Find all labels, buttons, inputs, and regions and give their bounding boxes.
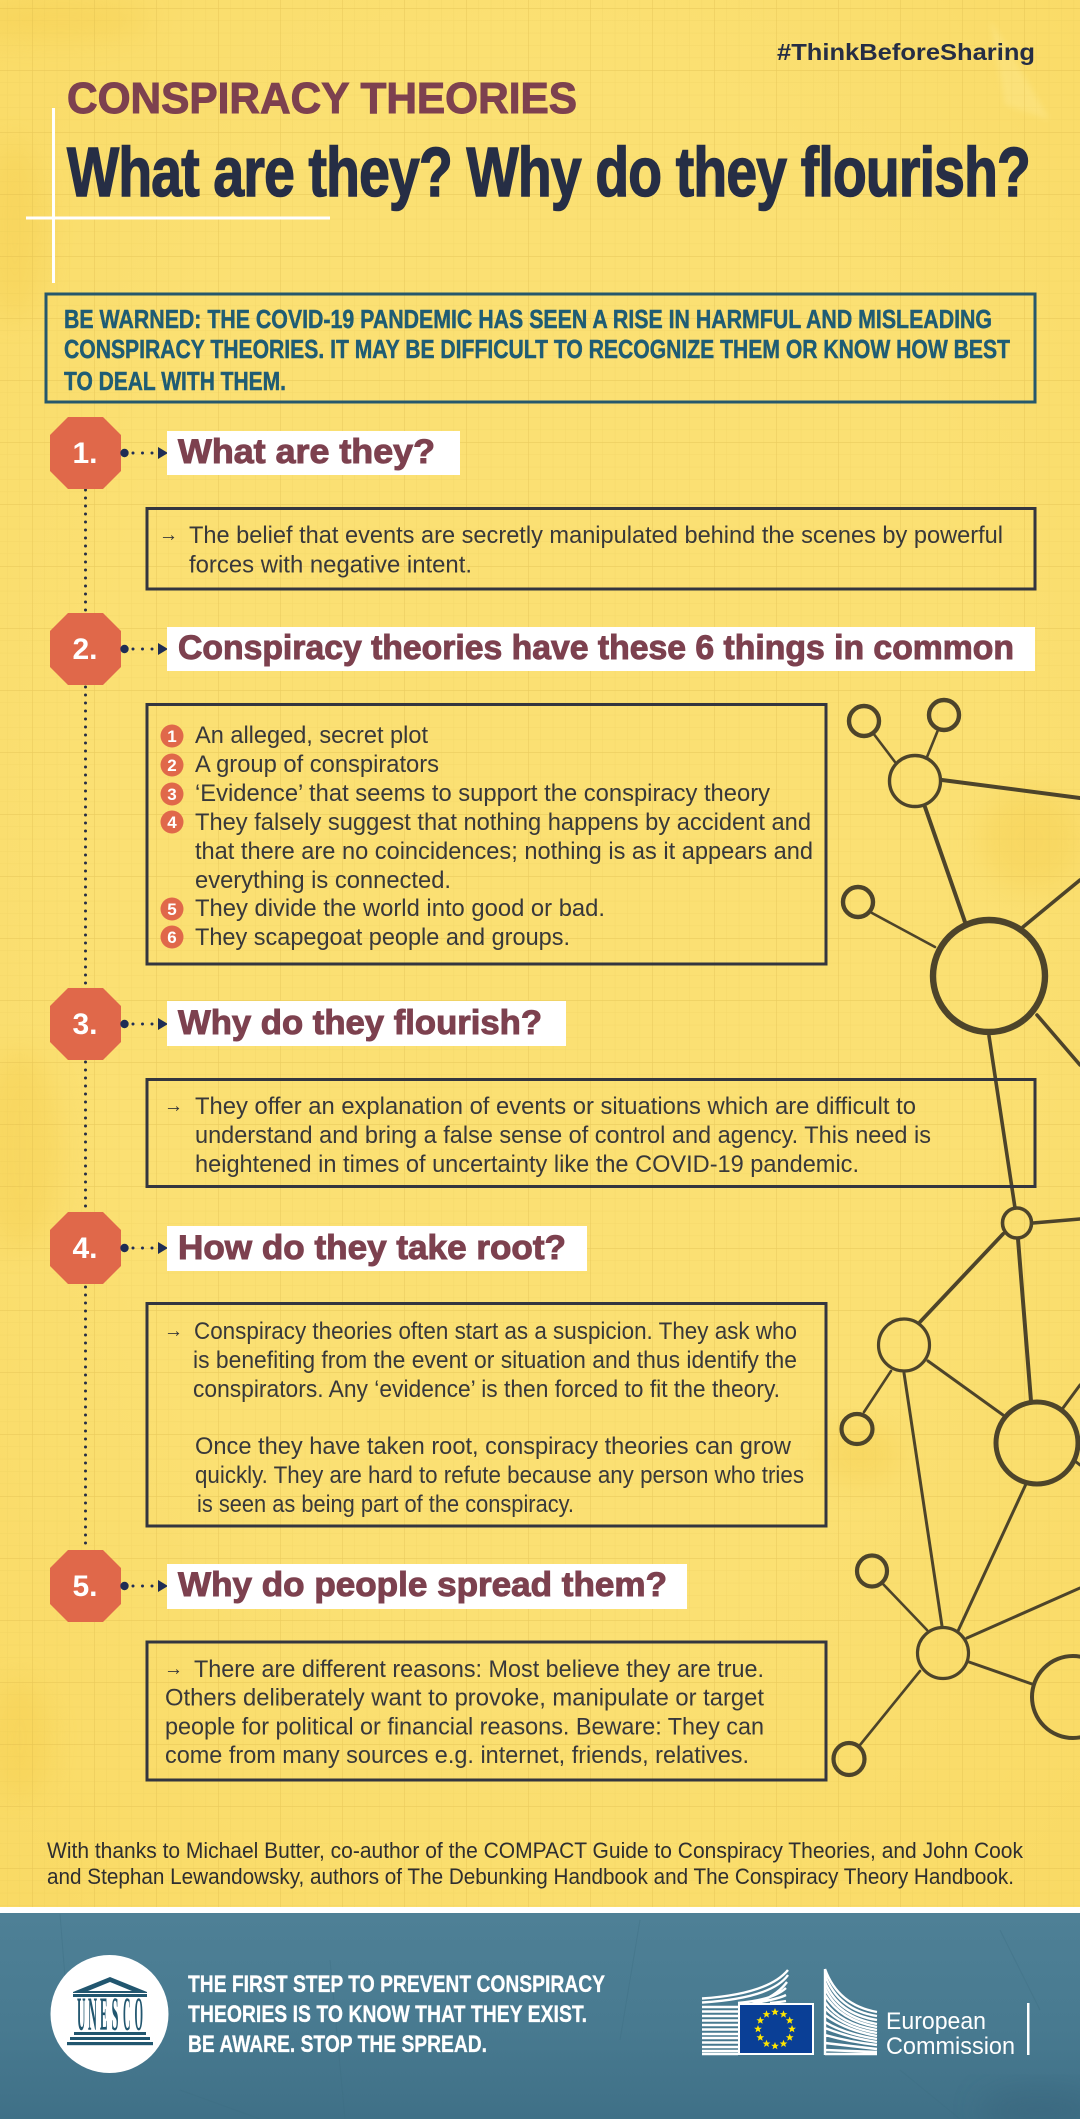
item 4: 4 — [167, 813, 177, 832]
item 4 — [160, 809, 813, 894]
step 5 heading: Why do people spread them? — [178, 1566, 667, 1604]
step 5 heading: 5. — [72, 1570, 98, 1603]
building stripes — [702, 1969, 877, 2055]
step 4 heading: How do they take root? — [178, 1229, 566, 1267]
step 3 heading: 3. — [72, 1008, 98, 1041]
step 3 text box: heightened in times of uncertainty like the COVID-19 pandemic. — [195, 1151, 859, 1178]
footer call to action: THE FIRST STEP TO PREVENT CONSPIRACY — [188, 1971, 605, 1998]
timeline dotted line — [84, 490, 87, 1548]
footer call to action: THEORIES IS TO KNOW THAT THEY EXIST. — [188, 2001, 587, 2028]
step 2 list box — [147, 704, 826, 964]
temple steps — [67, 2032, 153, 2045]
step 5 text box: come from many sources e.g. internet, friends, relatives. — [165, 1742, 749, 1769]
step 1 text box: → — [159, 524, 178, 546]
step 5 heading — [50, 1550, 687, 1622]
item 2: A group of conspirators — [195, 751, 439, 778]
title cross-hair lines — [26, 108, 330, 283]
hashtag: #ThinkBeforeSharing — [777, 39, 1035, 65]
UNESCO letters: E — [100, 1988, 108, 2041]
acknowledgements: and Stephan Lewandowsky, authors of The Debunking Handbook and The Conspiracy Theory Handbook. — [47, 1864, 1014, 1889]
step 3 text box: understand and bring a false sense of control and agency. This need is — [195, 1122, 931, 1149]
UNESCO letters: C — [123, 1988, 130, 2041]
step 4 text box: quickly. They are hard to refute because any person who tries — [195, 1462, 804, 1489]
step 1 text box: The belief that events are secretly manipulated behind the scenes by powerful — [189, 522, 1003, 549]
step 5 text box: → — [164, 1658, 183, 1680]
UNESCO logo: O — [134, 1988, 143, 2041]
decorative network illustration — [834, 700, 1080, 1775]
item 1: 1 — [167, 727, 177, 746]
item 3: ‘Evidence’ that seems to support the conspiracy theory — [195, 780, 770, 807]
EU flag — [739, 2004, 813, 2054]
step 3 heading: Why do they flourish? — [178, 1004, 542, 1042]
wordmark: European — [886, 2008, 986, 2035]
warning box: TO DEAL WITH THEM. — [64, 366, 286, 396]
step 4 text box: → — [164, 1320, 183, 1342]
eyebrow heading: CONSPIRACY THEORIES — [67, 74, 577, 123]
footer band — [0, 1907, 1080, 2119]
step 2 heading: 2. — [72, 633, 98, 666]
item 6: They scapegoat people and groups. — [195, 924, 570, 951]
step 2 heading: Conspiracy theories have these 6 things in common — [178, 629, 1014, 667]
step 4 text box: Conspiracy theories often start as a suspicion. They ask who — [194, 1318, 797, 1345]
temple pediment — [73, 1977, 147, 1997]
step 3 heading — [50, 988, 566, 1060]
step 4 text box: Once they have taken root, conspiracy theories can grow — [195, 1433, 792, 1460]
step 5 text box: There are different reasons: Most believe they are true. — [194, 1656, 764, 1683]
step 1 heading: 1. — [72, 437, 98, 470]
step 4 heading — [50, 1212, 587, 1284]
footer call to action — [188, 1971, 605, 2058]
acknowledgements: With thanks to Michael Butter, co-author of the COMPACT Guide to Conspiracy Theories, and John Cook — [47, 1838, 1024, 1863]
UNESCO logo — [50, 1955, 168, 2073]
item 5: 5 — [167, 900, 177, 919]
step 1 text box — [147, 508, 1035, 589]
step 3 text box: → — [164, 1095, 183, 1117]
item 5: They divide the world into good or bad. — [195, 895, 605, 922]
UNESCO letters: S — [112, 1988, 118, 2041]
step 3 text box: They offer an explanation of events or situations which are difficult to — [195, 1093, 916, 1120]
step 5 text box: people for political or financial reasons. Beware: They can — [165, 1714, 764, 1740]
warning box — [46, 294, 1035, 402]
acknowledgements — [47, 1838, 1024, 1889]
UNESCO letters: U — [77, 1988, 86, 2041]
step 4 text box: conspirators. Any ‘evidence’ is then forced to fit the theory. — [193, 1376, 780, 1403]
step 2 heading — [50, 613, 1035, 685]
step 4 heading: 4. — [72, 1232, 98, 1265]
European Commission logo: Commission — [886, 2033, 1015, 2060]
item 4: They falsely suggest that nothing happens by accident and — [195, 809, 811, 836]
step 4 text box: is seen as being part of the conspiracy. — [197, 1491, 574, 1518]
step 5 text box — [147, 1642, 826, 1780]
UNESCO letters: N — [88, 1988, 97, 2041]
item 4: that there are no coincidences; nothing is as it appears and — [195, 838, 813, 865]
step 1 heading: What are they? — [178, 433, 435, 471]
item 1: An alleged, secret plot — [195, 722, 428, 749]
step 1 text box: forces with negative intent. — [189, 552, 472, 578]
item 6: 6 — [167, 928, 177, 947]
European Commission logo — [702, 1969, 1030, 2060]
step 4 text box: is benefiting from the event or situation and thus identify the — [193, 1347, 797, 1374]
UNESCO letters — [77, 1988, 143, 2041]
footer call to action: BE AWARE. STOP THE SPREAD. — [188, 2031, 487, 2058]
step 5 text box: Others deliberately want to provoke, manipulate or target — [165, 1684, 764, 1712]
step 3 text box — [147, 1080, 1035, 1186]
item 3: 3 — [167, 785, 177, 804]
step 4 text box — [147, 1304, 826, 1526]
item 4: everything is connected. — [195, 867, 451, 894]
step 1 heading — [50, 417, 460, 489]
item 2: 2 — [167, 756, 177, 775]
